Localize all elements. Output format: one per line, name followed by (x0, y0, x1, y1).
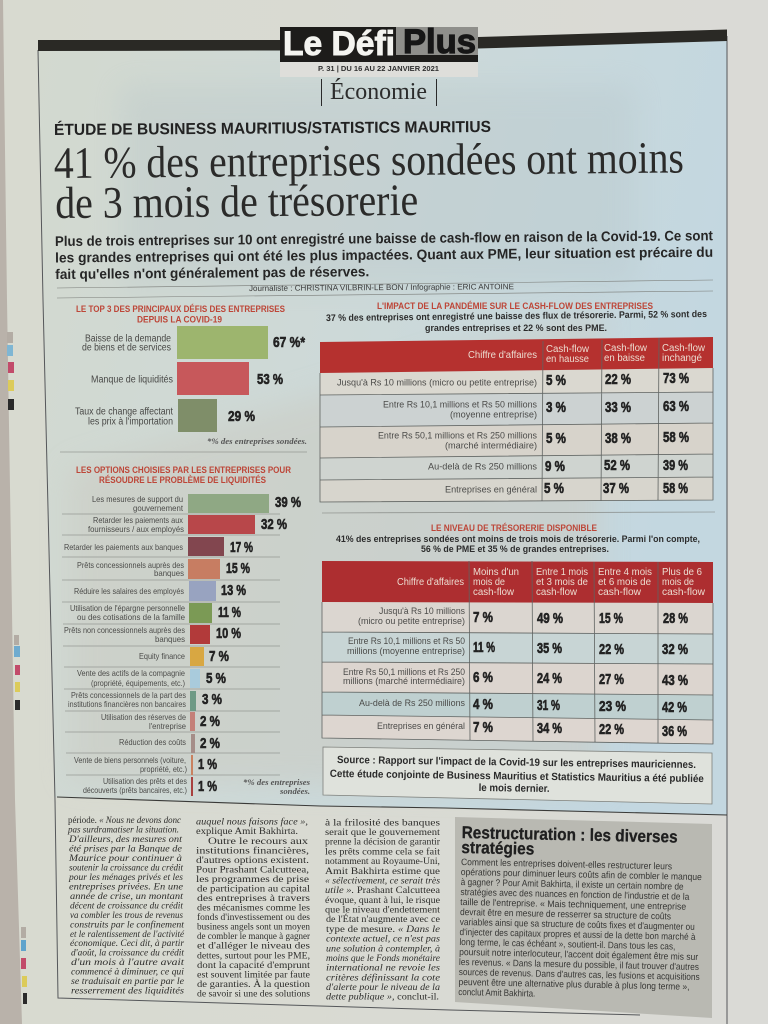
article column 2: et d'alléger le niveau des (197, 941, 310, 952)
bar 7: Prêts non concessionnels auprès des (64, 625, 185, 635)
article column 2: de savoir si une des solutions (197, 988, 310, 999)
bar 5 (74, 581, 246, 601)
bar 7 (64, 625, 241, 644)
article column 1: D'ailleurs, des mesures ont (68, 834, 182, 845)
row 2: 63 % (663, 399, 689, 415)
heading: top 3 (76, 304, 285, 326)
article column 3: une solution à contempler, à (326, 943, 440, 954)
table header (322, 561, 713, 603)
article column 3: critères définissant la cote (326, 972, 441, 983)
article column 1: commencé à diminuer, ce qui (71, 967, 184, 978)
bar 6 (70, 603, 241, 623)
row 5: 58 % (663, 481, 688, 497)
article column 2: fonds d'investissement ou des (197, 912, 310, 923)
bar: manque de liquidités: Manque de liquidités (91, 374, 173, 386)
article column 2: de garanties. À la question (197, 978, 310, 990)
row 4: 42 % (662, 700, 687, 716)
table header: cash-flow (473, 587, 515, 598)
table header: cash-flow (536, 587, 578, 598)
heading: cash level: 56 % de PME et 35 % de grandes entreprises. (421, 544, 609, 555)
article column 3: les prêts comme cela se fait (325, 846, 440, 857)
row 4 (428, 458, 688, 475)
article column 2: les programmes de prise (196, 874, 309, 885)
bar 10: institutions financières non bancaires (68, 699, 186, 709)
article column 1: va combler les trous de revenus (70, 910, 183, 921)
main title: 41 % des entreprises sondées ont moins (54, 133, 684, 188)
article column 2: business angels sont un moyen (197, 922, 310, 933)
byline: Journaliste : CHRISTINA VILBRIN-LE BON / Infographie : ERIC ANTOINE (249, 282, 514, 293)
article column 1: pas surdramatiser la situation. (67, 824, 179, 836)
row 3: 6 % (473, 670, 493, 686)
article column 1: été prises par la Banque de (69, 843, 183, 854)
bar 4: banques (154, 568, 184, 578)
article column 2: de participation au capital (197, 884, 310, 894)
panel bottom rule (57, 797, 727, 815)
row 2: 33 % (605, 400, 631, 416)
grey shading in lower panel (70, 310, 600, 790)
row 4: 31 % (537, 698, 560, 714)
bar 4 (77, 559, 250, 579)
sidebar body text: taille de l'entreprise. « Mais techniquement, une entreprise (460, 897, 686, 912)
article column 2: des entreprises à travers (197, 893, 310, 904)
table header: en baisse (604, 353, 645, 364)
table header: et 6 mois de (598, 577, 651, 588)
table header: Entre 4 mois (598, 567, 652, 578)
row 2: 32 % (662, 642, 688, 658)
article column 1: Maurice pour continuer à (68, 853, 182, 864)
bar 5: 13 % (221, 583, 246, 599)
heading: impact: 37 % des entreprises ont enregistré une baisse des flux de trésorerie. Parmi, 52 % sont des (326, 309, 707, 324)
table: cash level (322, 561, 713, 744)
row 5: 7 % (473, 720, 493, 736)
heading: top 3: DEPUIS LA COVID-19 (137, 314, 222, 326)
row 3: 58 % (663, 430, 689, 446)
article column 3: que le niveau d'endettement (325, 904, 440, 916)
bar 11 (101, 712, 220, 731)
article column 3: type de mesure. « Dans le (326, 924, 441, 935)
bar 9: Vente des actifs de la compagnie (77, 668, 185, 678)
bar: baisse de la demande: de biens et de services (82, 342, 171, 354)
kicker: ÉTUDE DE BUSINESS MAURITIUS/STATISTICS MAURITIUS (54, 117, 491, 139)
article column 3: à la frilosité des banques (325, 817, 440, 828)
sidebar body text: devrait être en mesure de resserrer sa structure de coûts (460, 907, 671, 921)
bar 11: Utilisation des réserves de (101, 712, 186, 722)
article column 3: d'alerte pour le niveau de la (326, 982, 440, 993)
sidebar body text: opérations pour diminuer leurs coûts afin de combler le manque (461, 867, 702, 882)
article column 1: se traduisait en partie par le (71, 976, 185, 987)
row 2: Entre Rs 10,1 millions et Rs 50 millions (383, 400, 537, 410)
bar 8: 7 % (209, 649, 229, 665)
row 1: 73 % (663, 371, 689, 387)
bar: baisse de la demande: Baisse de la demande (85, 334, 171, 344)
row 3: 43 % (662, 673, 688, 689)
bar 4: 15 % (226, 561, 250, 577)
article column 2: Outre le recours aux (208, 836, 308, 847)
bar 2: 32 % (261, 517, 287, 533)
row 4: 4 % (473, 697, 493, 713)
row 1: 15 % (599, 611, 623, 627)
table header: Plus de 6 (662, 567, 702, 578)
row 5: 5 % (544, 481, 564, 497)
article column 3: Amit Bakhirta estime que (325, 866, 440, 877)
sidebar body text: à gagner ? Pour Amit Bakhirta, il existe un certain nombre de (461, 877, 684, 892)
table header: Chiffre d'affaires (397, 577, 464, 588)
bar 11: 2 % (200, 714, 220, 730)
bar 10: 3 % (202, 692, 222, 708)
sidebar body text: conclut Amit Bakhirta. (458, 987, 535, 999)
row 2: (moyenne entreprise) (450, 410, 537, 420)
row 4: Au-delà de Rs 250 millions (428, 462, 537, 472)
bar 1: gouvernement (133, 503, 184, 513)
panel: available cash (322, 523, 713, 744)
heading: options (76, 465, 291, 486)
black header band (38, 30, 727, 51)
article column 1: d'un mois à l'autre avait (71, 957, 184, 968)
row 2: 11 % (473, 640, 495, 656)
article column 2: institutions financières, (196, 845, 309, 856)
sidebar body text: variables ainsi que sa structure de coûts fixes et d'augmenter ou (460, 917, 695, 932)
main title: de 3 mois de trésorerie (55, 175, 418, 228)
row 3: 24 % (537, 671, 562, 687)
row 3 (343, 667, 688, 689)
bar 1 (92, 494, 301, 513)
article column 1: soutenir la croissance du crédit (69, 862, 183, 873)
article column 2 (196, 817, 311, 999)
row 2: Entre Rs 10,1 millions et Rs 50 (348, 636, 465, 646)
article column 1: économique. Ceci dit, à partir (70, 938, 184, 949)
sidebar heading: Restructuration : les diverses (461, 823, 678, 847)
lead paragraph: Plus de trois entreprises sur 10 ont enregistré une baisse de cash-flow en raison de la Covid-19. Ce sont (55, 227, 713, 249)
bar 4: Prêts concessionnels auprès des (77, 560, 184, 570)
sidebar body text: long terme, le cas échéant », soutient-il. Dans tous les cas, (459, 937, 675, 952)
sidebar body text: stratégies avec des nuances en fonction de l'industrie et de la (460, 887, 690, 902)
sidebar heading (461, 823, 678, 862)
row 3 (378, 430, 689, 452)
bar 12: 2 % (200, 736, 220, 752)
row 5: 22 % (599, 722, 624, 738)
row 3: Entre Rs 50,1 millions et Rs 250 (343, 667, 465, 677)
bar 12: Réduction des coûts (119, 737, 186, 747)
bar: baisse de la demande (82, 326, 305, 359)
article column 3: de l'État n'augmente avec ce (326, 913, 440, 925)
lead paragraph: fait qu'elles n'ont généralement pas de réserves. (55, 263, 369, 282)
article column 3: évoque, quant à lui, le risque (325, 895, 440, 906)
row 2: 3 % (546, 400, 566, 416)
article column 2: dettes, surtout pour les PME, (197, 950, 310, 961)
article column 2: explique Amit Bakhirta. (196, 826, 298, 837)
bar 14: découverts (prêts bancaires, etc.) (83, 785, 187, 795)
bar: baisse de la demande: 67 %* (273, 335, 305, 351)
table header: Moins d'un (473, 567, 519, 578)
article column 1: et le ralentissement de l'activité (70, 929, 185, 940)
row 4: 52 % (604, 458, 630, 474)
row 4: Au-delà de Rs 250 millions (359, 698, 465, 708)
bar: taux de change: les prix à l'importation (88, 416, 173, 428)
row 4: 9 % (545, 459, 565, 475)
sidebar: restructuring strategies (455, 817, 712, 1018)
article column 2: des mécanismes comme les (197, 903, 310, 914)
row 1: 7 % (473, 610, 493, 626)
row 2: 35 % (537, 641, 562, 657)
bar 3 (64, 537, 253, 556)
row 3: millions (marché intermédiaire) (343, 676, 465, 686)
bar 3: Retarder les paiements aux banques (64, 542, 183, 552)
masthead logo: P. 31 | DU 16 AU 22 JANVIER 2021 (318, 64, 439, 73)
row 1: Jusqu'à Rs 10 millions (379, 606, 465, 616)
printer colour marks (7, 332, 27, 1004)
heading: options: RÉSOUDRE LE PROBLÈME DE LIQUIDITÉS (99, 475, 266, 486)
lead paragraph: les grandes entreprises qui ont été les plus impactées. Quant aux PME, leur situation est précaire du (55, 244, 713, 265)
article column 3: prenne la décision de garantir (325, 837, 441, 848)
row 1: Jusqu'à Rs 10 millions (micro ou petite entreprise) (337, 378, 537, 388)
bar 13: propriété, etc.) (140, 764, 187, 774)
bar 2 (88, 515, 287, 534)
bar 3: 17 % (230, 540, 253, 556)
sidebar body text: d'injecter des capitaux propres et aussi de la dette bon marché à (459, 927, 696, 942)
article column 3: « sélectivement, ce serait très (325, 875, 440, 886)
show-through ghost panel (120, 85, 636, 285)
bar 10 (68, 690, 222, 711)
article column 1: resserrement des liquidités (71, 986, 184, 997)
bar 12 (119, 734, 220, 753)
article column 2: de combler le manque à gagner (197, 931, 311, 942)
row 2 (383, 399, 689, 420)
bar: taux de change (75, 399, 255, 432)
table header: mois de (662, 577, 694, 588)
article column 2: auquel nous faisons face », (196, 817, 308, 828)
article column 1: d'août, la croissance du crédit (71, 948, 184, 959)
row 3: Entre Rs 50,1 millions et Rs 250 millions (378, 430, 537, 442)
panel: top 3 challenges (75, 304, 307, 446)
row 4 (359, 697, 687, 716)
article column 2: d'autres options existent. (196, 855, 309, 866)
row 3: (marché intermédiaire) (445, 440, 537, 452)
row 1: 28 % (663, 611, 688, 627)
bar 6: 11 % (218, 605, 241, 621)
bar 10: Prêts concessionnels de la part des (71, 690, 186, 700)
article column 1: pour les ménages privés et les (68, 872, 183, 883)
row 5: 37 % (603, 481, 629, 497)
bar 14: Utilisation des prêts et des (103, 776, 187, 786)
bar 1: Les mesures de support du (92, 494, 183, 504)
article column 3 (325, 817, 441, 1003)
table header (320, 337, 713, 373)
bar 8 (139, 647, 229, 666)
row 5: 34 % (537, 721, 562, 737)
bar 7: 10 % (216, 626, 241, 642)
bar 9 (77, 668, 226, 688)
bar 11: l'entreprise (149, 721, 186, 731)
bar 6: Utilisation de l'épargne personnelle (70, 603, 185, 613)
lead paragraph (55, 227, 714, 282)
bar 2: Retarder les paiements aux (93, 515, 184, 525)
sidebar body text: peuvent être une alternative plus durable à plus long terme », (458, 977, 690, 992)
table header: en hausse (546, 354, 589, 365)
row 2: 22 % (599, 642, 624, 658)
heading: impact (326, 301, 707, 334)
bar 9: 5 % (206, 671, 226, 687)
main title (54, 133, 684, 228)
row 1 (358, 606, 688, 627)
table header: cash-flow (662, 587, 706, 598)
source box: Cette étude conjointe de Business Mauritius et Statistics Mauritius a été publiée (330, 768, 704, 785)
sidebar body text: poursuit notre interlocuteur, l'accent doit également être mis sur (459, 947, 698, 962)
heading: impact: grandes entreprises et 22 % sont des PME. (425, 323, 607, 334)
row 2: millions (moyenne entreprise) (347, 646, 465, 656)
row 1 (337, 371, 689, 389)
article column 3: serait que le gouvernement (325, 827, 440, 838)
table header: Chiffre d'affaires (468, 350, 537, 361)
left page gutter (0, 0, 22, 1024)
article column 2: Pour Prashant Calcutteea, (196, 864, 309, 875)
heading: top 3: LE TOP 3 DES PRINCIPAUX DÉFIS DES ENTREPRISES (76, 304, 285, 315)
article column 3: moins que le Fonds monétaire (326, 953, 441, 964)
footnote: sondées. (279, 787, 310, 796)
section label: Économie (330, 79, 427, 105)
row 3: 38 % (605, 431, 631, 447)
table header: Cash-flow (546, 344, 590, 355)
article column 1: période. « Nous ne devons donc (68, 815, 182, 826)
row 1: 22 % (605, 372, 631, 388)
article column 2: est souvent limitée par faute (197, 969, 310, 980)
bar 13 (74, 755, 217, 775)
bar 13: 1 % (198, 757, 217, 773)
bar 2: fournisseurs / aux employés (88, 524, 184, 534)
row 5: 36 % (662, 724, 687, 740)
row 2 (347, 636, 688, 658)
panel: cash-flow impact (320, 301, 713, 502)
article column 3: notamment au Royaume-Uni, (325, 856, 440, 867)
sidebar body text: sources de revenus. Dans d'autres cas, les fusions et acquisitions (459, 967, 700, 982)
article column 1 (67, 815, 185, 997)
source box: le mois dernier. (479, 782, 550, 795)
heading: options: LES OPTIONS CHOISIES PAR LES ENTREPRISES POUR (76, 465, 291, 476)
row 5 (377, 720, 687, 740)
sidebar body text: les revenus. « Dans la mesure du possible, il faut trouver d'autres (459, 957, 699, 972)
row 4: 39 % (663, 458, 688, 474)
source box (323, 747, 712, 804)
article column 3: utile ». Prashant Calcutteea (325, 885, 441, 896)
sidebar heading: stratégies (461, 838, 535, 859)
panel: options chosen (62, 465, 310, 796)
bar: manque de liquidités (91, 362, 283, 395)
table header: mois de (473, 577, 505, 588)
bar 8: Equity finance (139, 651, 185, 661)
article column 1: année de crise, un montant (70, 891, 183, 902)
bar: taux de change: Taux de change affectant (75, 406, 173, 418)
bar 14: 1 % (198, 779, 217, 795)
bar: manque de liquidités: 53 % (257, 372, 283, 388)
footnote: *% des entreprises sondées. (207, 437, 307, 446)
masthead logo: Plus (403, 23, 476, 61)
article column 3: contexte actuel, ce n'est pas (326, 934, 440, 945)
row 5: Entreprises en général (377, 721, 465, 731)
row 3: 5 % (546, 431, 566, 447)
byline (57, 280, 713, 298)
table header: Entre 1 mois (536, 567, 588, 578)
article column 1: entreprises privées. En une (69, 881, 184, 892)
row 5 (445, 481, 688, 497)
bar 1: 39 % (275, 495, 301, 511)
sidebar body text: Comment les entreprises doivent-elles restructurer leurs (461, 857, 672, 871)
table header: et 3 mois de (536, 577, 588, 588)
article column 2: dont la capacité d'emprunt (197, 960, 310, 971)
masthead logo (280, 23, 478, 77)
bar 14 (83, 776, 217, 796)
table header: inchangé (662, 353, 702, 364)
heading: cash level (336, 523, 700, 555)
row 5: Entreprises en général (445, 484, 537, 496)
bar 5: Réduire les salaires des employés (74, 586, 184, 596)
row 1: 5 % (546, 373, 566, 389)
heading: cash level: LE NIVEAU DE TRÉSORERIE DISPONIBLE (431, 523, 597, 534)
row 1: (micro ou petite entreprise) (358, 616, 465, 626)
main tinted panel (38, 40, 727, 815)
article column 3: dette publique », conclut-il. (326, 992, 439, 1003)
bar: taux de change: 29 % (228, 409, 255, 425)
source box: Source : Rapport sur l'impact de la Covid-19 sur les entreprises mauriciennes. (337, 754, 696, 771)
sidebar body text (458, 857, 702, 1002)
row 1: 49 % (537, 611, 563, 627)
table header: Cash-flow (604, 343, 648, 354)
article column 3: international ne revoie les (326, 963, 440, 974)
table header: Cash-flow (662, 343, 706, 354)
heading: cash level: 41% des entreprises sondées ont moins de trois mois de trésorerie. Parmi l'on compte, (336, 534, 700, 545)
masthead logo: Le Défi (283, 25, 395, 63)
table: cash-flow (320, 337, 713, 502)
row 4: 23 % (599, 699, 626, 715)
row 3: 27 % (599, 672, 624, 688)
article column 1: construits par le confinement (70, 919, 184, 930)
footnote: *% des entreprises (243, 778, 310, 787)
bar 9: (propriété, équipements, etc.) (91, 678, 185, 688)
bar 6: ou des cotisations de la famille (77, 612, 185, 622)
bar 13: Vente de biens personnels (voiture, (74, 755, 186, 765)
footnote (243, 778, 310, 796)
bar 7: banques (155, 634, 185, 644)
heading: impact: L'IMPACT DE LA PANDÉMIE SUR LE CASH-FLOW DES ENTREPRISES (377, 301, 653, 312)
table header: cash-flow (598, 587, 642, 598)
article column 1: décent de croissance du crédit (70, 900, 183, 911)
